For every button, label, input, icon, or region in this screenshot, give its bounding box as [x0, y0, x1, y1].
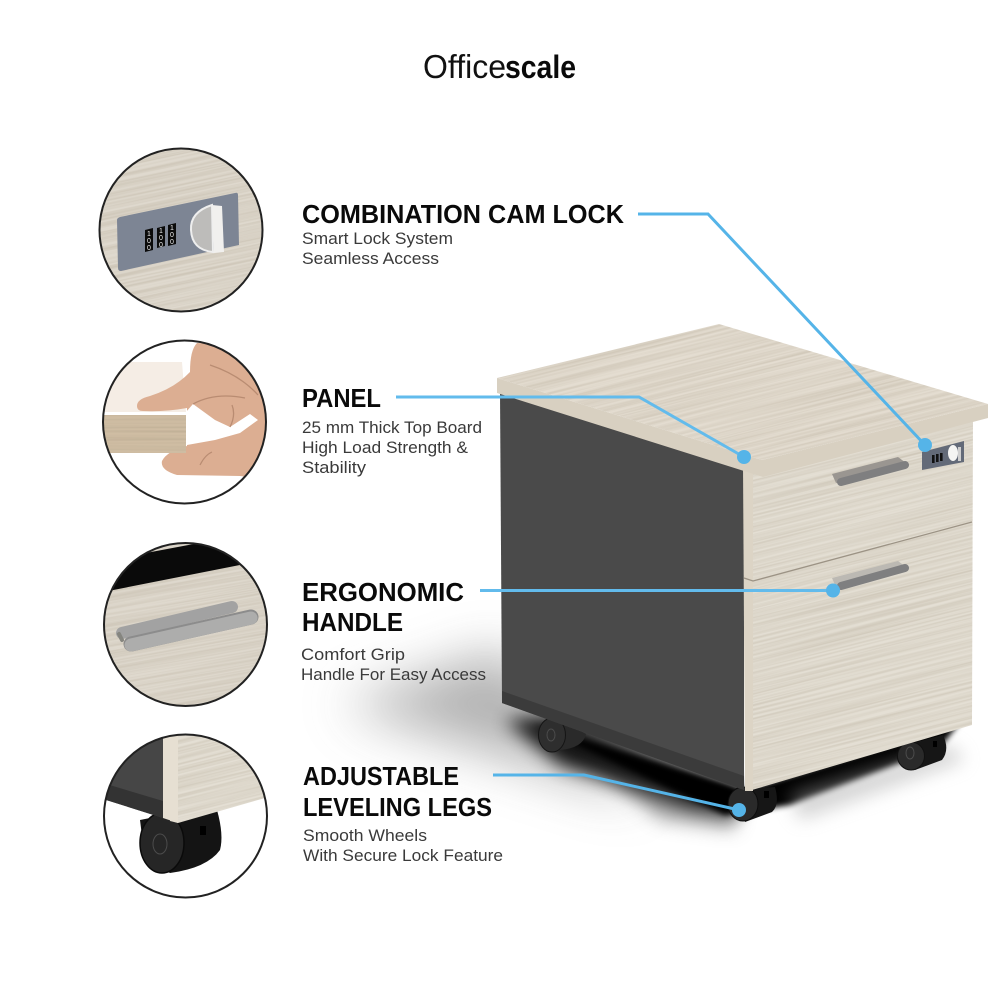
front face	[753, 422, 973, 790]
pale board surface	[100, 362, 186, 412]
lock plate	[117, 193, 239, 271]
rotary knob	[191, 205, 213, 252]
number wheels	[145, 223, 176, 252]
feature: ergonomic handle: ERGONOMIC	[302, 577, 464, 607]
feature: combination cam lock: COMBINATION CAM LOCK	[302, 199, 624, 229]
hand	[137, 343, 275, 480]
number wheels: 1	[147, 231, 151, 238]
logo: Officescale: scale	[505, 49, 576, 85]
floor shadow	[340, 650, 965, 830]
handle: upper drawer	[832, 457, 906, 483]
combination lock	[922, 441, 964, 470]
caster	[140, 810, 221, 873]
callout line: lock	[638, 214, 932, 452]
logo: Officescale: Office	[423, 48, 506, 85]
feature: adjustable leveling legs: Smooth Wheels	[303, 826, 427, 845]
feature: adjustable leveling legs: With Secure Lock Feature	[303, 846, 503, 865]
feature: panel	[302, 383, 482, 477]
feature: panel: Stability	[302, 458, 367, 477]
logo: Officescale	[423, 48, 576, 85]
feature: panel: 25 mm Thick Top Board	[302, 418, 482, 437]
dark side panel	[106, 738, 163, 816]
feature: ergonomic handle	[301, 577, 486, 684]
dark side panel	[500, 392, 744, 790]
feature: ergonomic handle: Comfort Grip	[301, 645, 405, 664]
caster: front	[728, 787, 777, 822]
board edge	[102, 415, 186, 453]
callout line: panel	[396, 397, 751, 464]
feature: adjustable leveling legs: LEVELING LEGS	[303, 792, 492, 822]
feature: adjustable leveling legs: ADJUSTABLE	[303, 761, 459, 791]
detail circle: handle	[103, 542, 268, 707]
detail circle: combination lock	[98, 148, 264, 312]
wood right face	[170, 736, 264, 823]
feature: panel: High Load Strength &	[302, 438, 469, 457]
feature: adjustable leveling legs	[303, 761, 503, 865]
callout line: legs	[493, 775, 746, 817]
feature: combination cam lock: Seamless Access	[302, 249, 439, 268]
top board surface	[498, 324, 988, 460]
number wheels: 0	[170, 232, 174, 239]
wood corner strip	[163, 730, 178, 823]
caster: rear right	[898, 735, 946, 770]
drawer divider	[744, 522, 972, 581]
feature: ergonomic handle: HANDLE	[302, 607, 403, 637]
callout line: handle	[480, 584, 840, 598]
number wheels: 0	[147, 245, 151, 252]
number wheels: 1	[170, 225, 174, 232]
black top band	[112, 544, 240, 590]
bottom strip	[502, 691, 744, 790]
detail circle: caster wheel	[103, 734, 268, 898]
number wheels: 0	[147, 238, 151, 245]
front edge strip	[743, 465, 753, 791]
feature: panel: PANEL	[302, 383, 381, 413]
feature: combination cam lock: Smart Lock System	[302, 229, 453, 248]
number wheels: 0	[159, 242, 163, 249]
number wheels: 0	[170, 239, 174, 246]
gap between fingers and thumb	[186, 404, 258, 445]
caster: rear left	[538, 716, 586, 752]
pedestal cabinet	[497, 324, 988, 822]
handle bar	[119, 607, 251, 645]
detail circle: thick top board	[100, 338, 275, 508]
handle: lower drawer	[832, 561, 906, 587]
feature: ergonomic handle: Handle For Easy Access	[301, 665, 486, 684]
feature: combination cam lock	[302, 199, 624, 268]
number wheels: 0	[159, 235, 163, 242]
number wheels: 1	[159, 228, 163, 235]
top board front edge	[497, 378, 988, 477]
